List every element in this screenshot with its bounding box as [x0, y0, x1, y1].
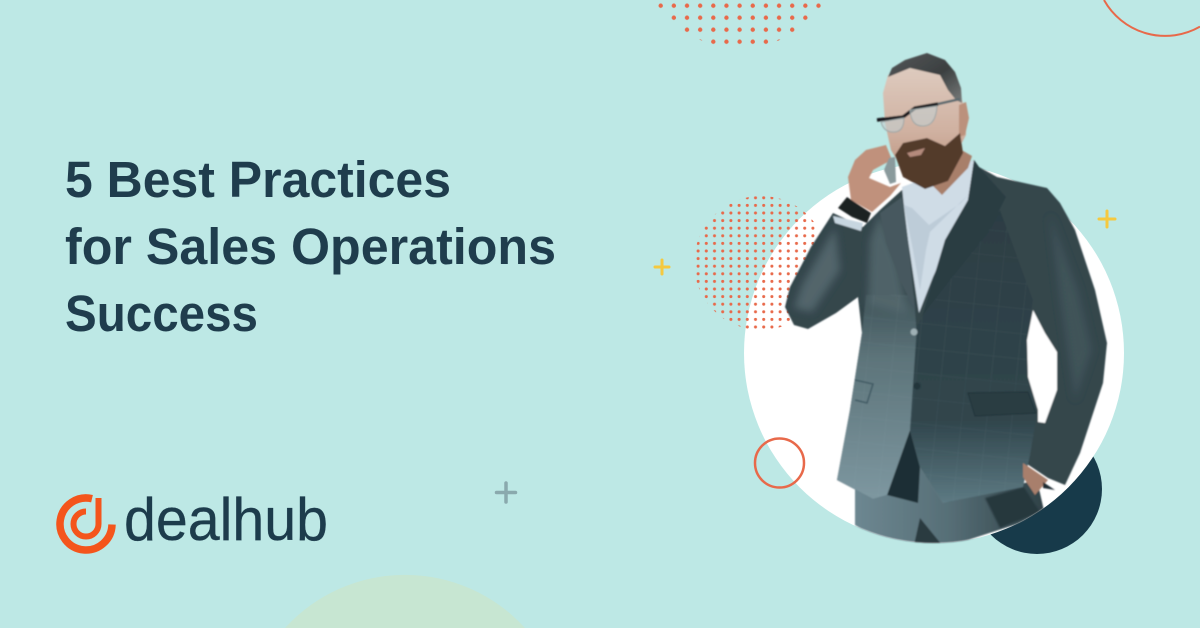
yellow plus right [1099, 211, 1115, 227]
shirt [902, 160, 974, 313]
right sleeve highlight [1050, 215, 1092, 400]
shirt cuff [833, 216, 863, 231]
hair [888, 53, 962, 103]
logo icon [60, 498, 112, 550]
jacket pockets [855, 380, 1036, 416]
hand in pocket [1023, 463, 1048, 495]
logo [60, 486, 328, 553]
gap between arm and body [1027, 310, 1057, 423]
bottom pale green hill [285, 575, 525, 628]
title: 5 Best Practices [65, 151, 451, 208]
jacket [785, 160, 1107, 503]
yellow plus left [655, 260, 669, 274]
ear [959, 102, 969, 137]
upper left chest shade [868, 213, 908, 315]
portrait of businessman on phone [785, 53, 1107, 548]
small orange ring [755, 438, 804, 488]
title: Success [65, 285, 258, 342]
glasses [877, 99, 960, 132]
title: for Sales Operations [65, 218, 556, 275]
watch [838, 197, 871, 223]
right lapel [922, 160, 1006, 317]
grey plus [496, 483, 516, 502]
hand at ear [848, 145, 901, 212]
plaid texture on jacket [837, 210, 1037, 503]
white portrait circle [744, 163, 1124, 543]
logo wordmark: dealhub [124, 486, 328, 553]
top right orange ring [1104, 0, 1200, 36]
trousers [855, 430, 1045, 548]
jacket right front panel [910, 210, 1037, 503]
left sleeve highlight [794, 228, 840, 312]
phone [884, 157, 896, 184]
jacket left front panel [837, 295, 917, 499]
halftone dot circle [696, 196, 820, 329]
shirt collar shadow [904, 195, 968, 290]
neck [925, 148, 972, 195]
lips [907, 148, 925, 157]
dark navy circle behind portrait [972, 424, 1102, 554]
title [65, 151, 556, 342]
beard [895, 133, 963, 189]
head [883, 62, 966, 180]
jacket buttons [910, 328, 920, 390]
top dot pattern [658, 3, 821, 44]
left lapel [880, 197, 915, 310]
jacket cuff flap [1043, 482, 1055, 490]
